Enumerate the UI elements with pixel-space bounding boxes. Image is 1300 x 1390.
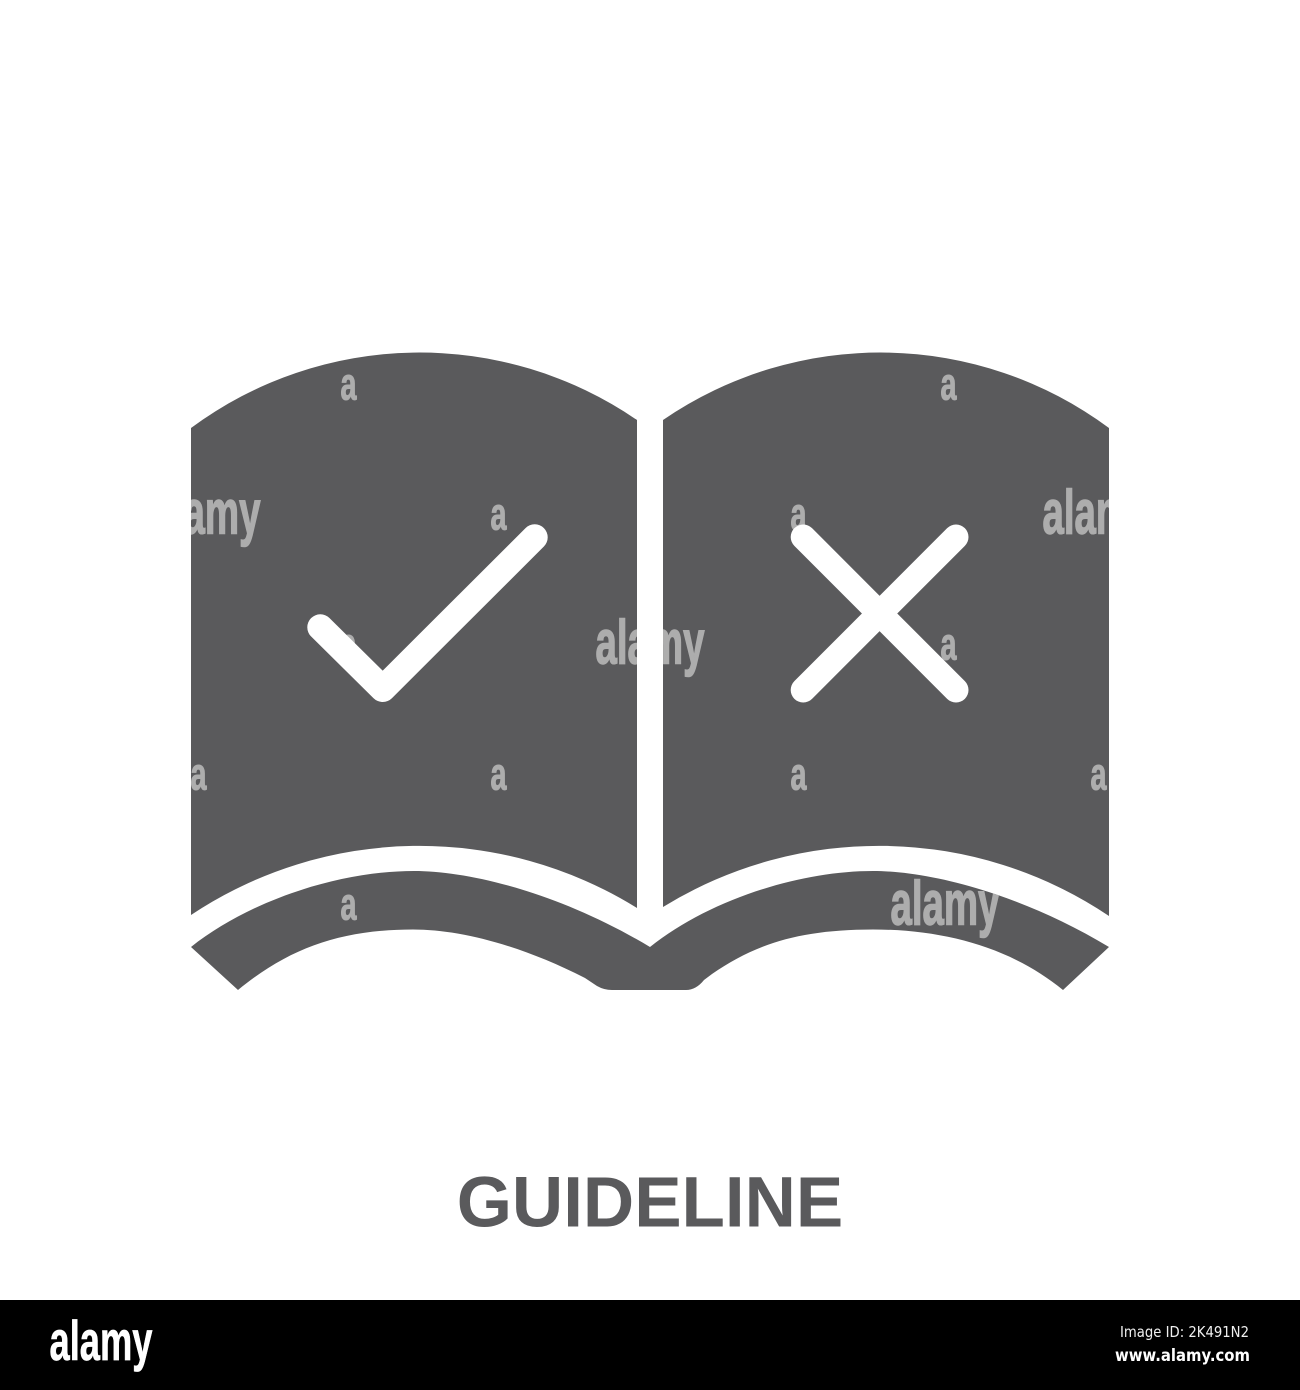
watermarks: alamy bbox=[890, 870, 1000, 938]
book cover bbox=[191, 871, 1109, 990]
icon: open book guideline bbox=[152, 353, 1152, 990]
watermarks: a bbox=[190, 748, 207, 800]
footer image id: Image ID: 2K491N2 bbox=[1120, 1323, 1249, 1341]
watermarks: a bbox=[790, 488, 807, 540]
watermarks: a bbox=[940, 358, 957, 410]
watermarks: a bbox=[340, 358, 357, 410]
footer url: www.alamy.com bbox=[1115, 1346, 1250, 1366]
watermarks: a bbox=[340, 878, 357, 930]
watermarks: a bbox=[790, 748, 807, 800]
watermarks bbox=[191, 374, 1109, 938]
left page bbox=[191, 353, 637, 915]
icon: check mark bbox=[320, 537, 535, 689]
watermarks: a bbox=[490, 488, 507, 540]
icon: cross mark bbox=[803, 537, 956, 690]
watermarks: a bbox=[340, 618, 357, 670]
watermarks: alamy bbox=[152, 478, 261, 548]
footer logo: alamy: alamy bbox=[50, 1309, 152, 1372]
label: GUIDELINE: GUIDELINE bbox=[457, 1164, 843, 1242]
watermarks: alamy bbox=[596, 608, 705, 678]
watermarks: a bbox=[1090, 748, 1107, 800]
watermarks: alamy bbox=[1042, 478, 1152, 548]
right page bbox=[663, 353, 1109, 916]
watermarks: a bbox=[490, 748, 507, 800]
watermarks: a bbox=[940, 618, 957, 670]
footer bar bbox=[0, 1300, 1300, 1390]
